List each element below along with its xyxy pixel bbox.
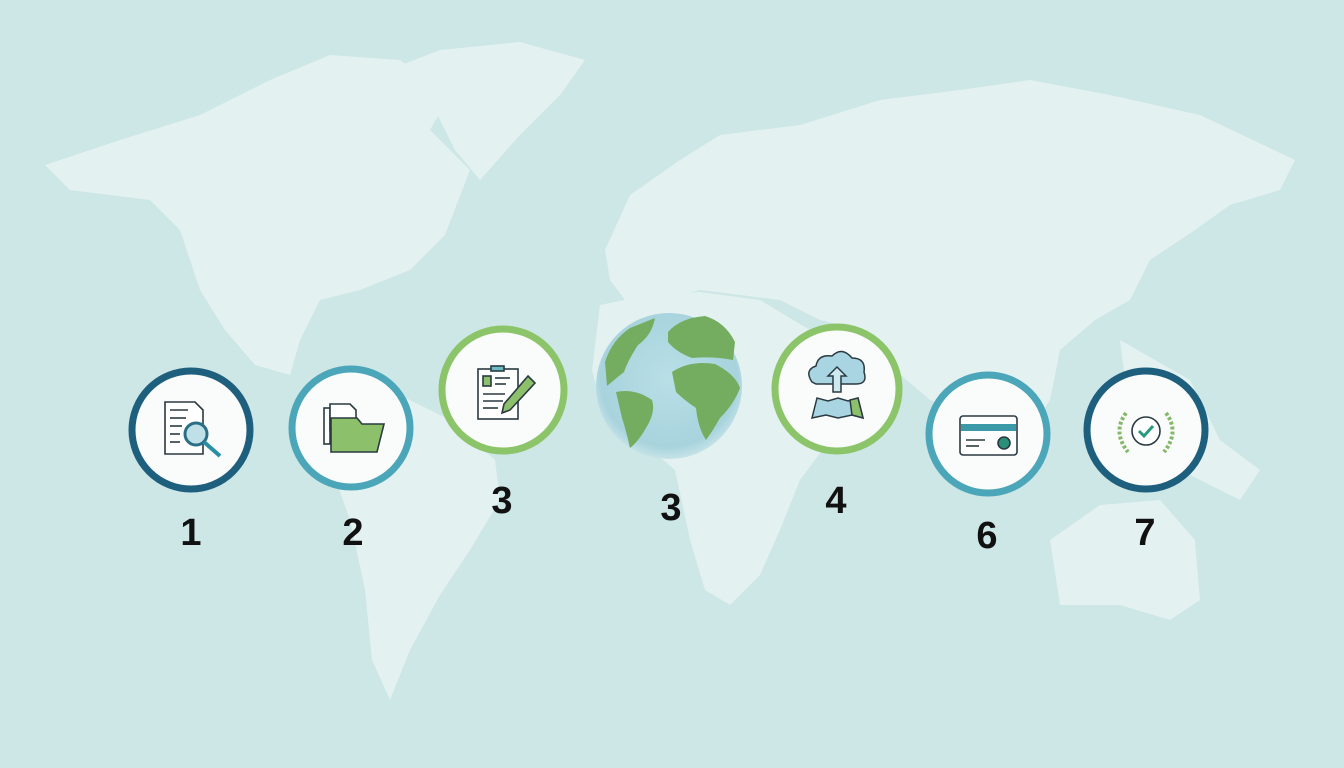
number 1: 1: [180, 512, 202, 554]
step 6: credit card: [929, 375, 1047, 493]
icon: folder: [324, 404, 384, 452]
icon: card with coin: [960, 416, 1017, 455]
icon: laurel wreath check badge: [1119, 413, 1173, 452]
number 3 (second): 3: [660, 487, 682, 529]
step 4: cloud upload map: [775, 327, 899, 451]
icon: cloud with arrow over map: [809, 351, 865, 418]
step 7: laurel check: [1087, 371, 1205, 489]
step 2: folder: [292, 369, 410, 487]
number 3: 3: [491, 480, 513, 522]
number 6: 6: [976, 515, 998, 557]
number 7: 7: [1134, 512, 1156, 554]
number 2: 2: [342, 512, 364, 554]
icon: clipboard with pencil: [478, 366, 535, 419]
globe: [596, 313, 742, 459]
step 3: clipboard: [442, 329, 564, 451]
world map background: [45, 42, 1295, 700]
step 1: document search: [132, 371, 250, 489]
number 4: 4: [825, 480, 847, 522]
icon: document with magnifier: [165, 402, 220, 456]
